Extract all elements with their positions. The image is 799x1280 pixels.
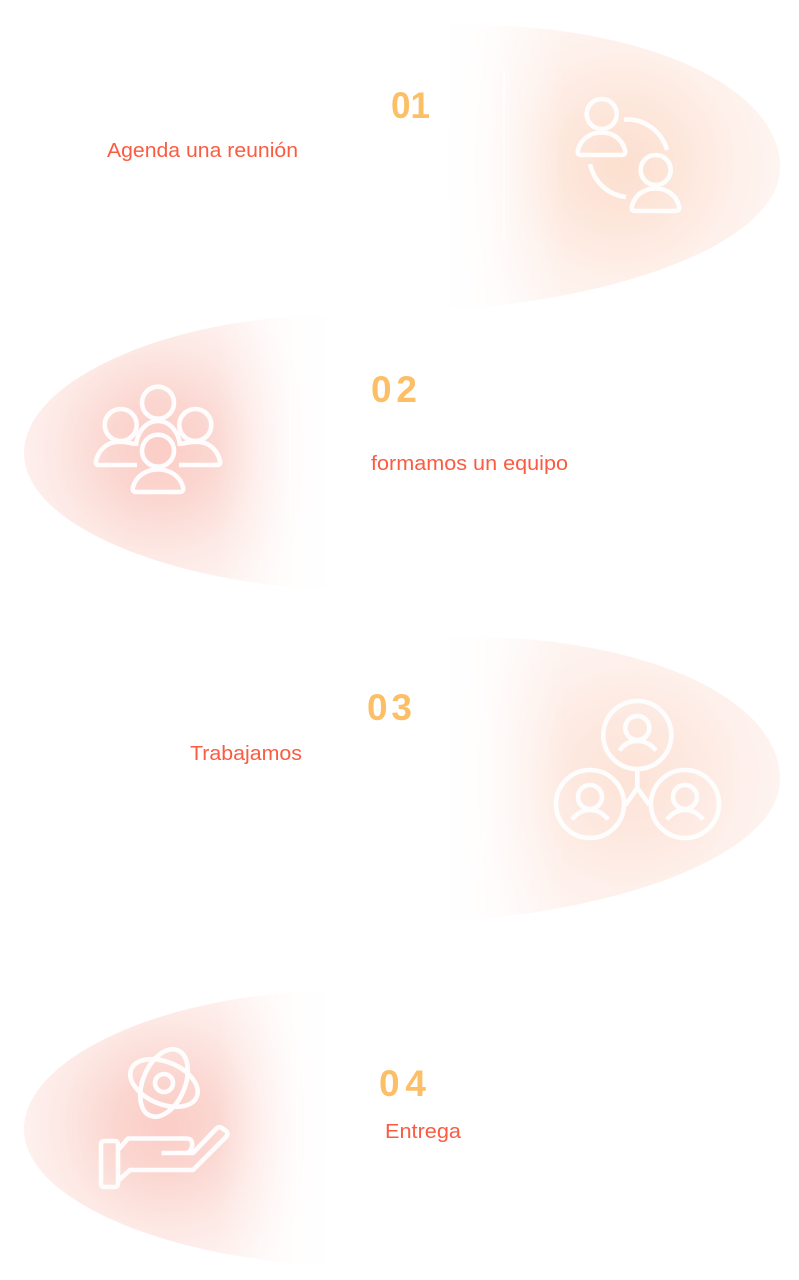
blob: step 01 — [502, 28, 780, 302]
blob: step 02 — [24, 320, 280, 582]
number: 02: 02 — [371, 369, 417, 410]
icon: two people exchanging — [578, 99, 679, 211]
panel: step 03 — [190, 637, 780, 920]
blob: step 04 — [24, 996, 281, 1258]
label: formamos un equipo: formamos un equipo — [371, 452, 568, 475]
panel: step 01 — [107, 25, 780, 308]
number: 01: 01 — [391, 85, 430, 126]
number: 04: 04 — [379, 1063, 426, 1104]
icon: hand holding atom — [101, 1042, 228, 1187]
label: Entrega: Entrega — [385, 1120, 462, 1143]
icon: connected people network — [556, 701, 719, 838]
number: 03: 03 — [367, 687, 412, 728]
icon: team of people — [96, 387, 220, 492]
panel: step 02 — [24, 316, 568, 588]
panel: step 04 — [24, 992, 462, 1264]
blob: step 03 — [504, 640, 780, 914]
label: Agenda una reunión: Agenda una reunión — [107, 139, 298, 162]
label: Trabajamos: Trabajamos — [190, 742, 302, 765]
